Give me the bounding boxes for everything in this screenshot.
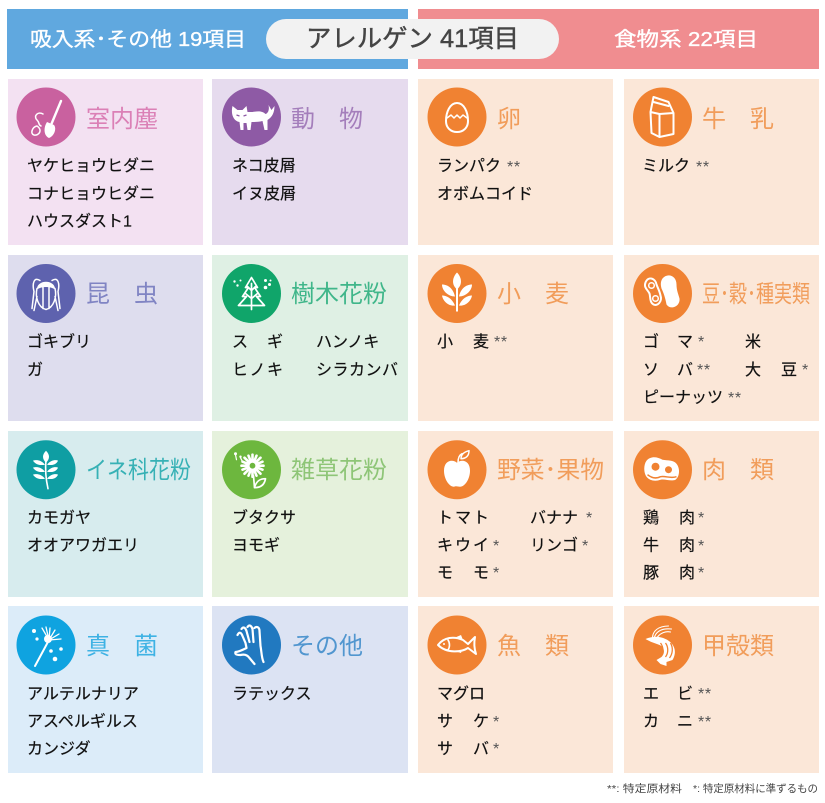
panel: 樹木花粉: シラカンバ: [316, 362, 398, 379]
panel: 真菌: アスペルギルス: [27, 712, 138, 730]
icon: apple: [428, 440, 486, 499]
panel: 豆・穀・種実類: [624, 255, 819, 421]
icon: cockroach: [16, 264, 76, 323]
panel: 豆・穀・種実類: 豆: [781, 362, 797, 379]
panel: 卵: 卵: [497, 106, 521, 133]
panel: 甲殻類: ニ: [677, 714, 693, 730]
panel: 魚類: サ: [437, 714, 453, 730]
panel: 野菜・果物: 野菜･果物: [497, 457, 604, 484]
icon: hand: [222, 616, 281, 674]
panel: 肉類: *: [698, 510, 705, 527]
panel: 卵: **: [507, 159, 521, 176]
panel: 室内塵: ハウスダスト1: [27, 212, 132, 230]
panel: 豆・穀・種実類: ピーナッツ: [643, 390, 723, 406]
panel: 真菌: [8, 606, 203, 773]
panel: 野菜・果物: モ: [437, 565, 453, 582]
panel: 牛乳: [624, 79, 819, 245]
panel: 豆・穀・種実類: *: [802, 362, 809, 379]
panel: 牛乳: ミルク: [642, 157, 690, 175]
panel: イネ科花粉: オオアワガエリ: [27, 536, 139, 554]
panel: 魚類: [418, 606, 613, 773]
panel: 小麦: [418, 255, 613, 421]
icon: wheat: [428, 264, 486, 323]
panel: 肉類: [624, 431, 819, 597]
title pill: [266, 19, 559, 59]
panel: 豆・穀・種実類: マ: [677, 334, 693, 351]
panel: 小麦: **: [494, 334, 508, 351]
panel: 肉類: *: [698, 565, 705, 582]
panel: 野菜・果物: トマト: [437, 510, 489, 527]
panel: 昆虫: ガ: [27, 361, 43, 379]
panel: 魚類: *: [493, 741, 500, 758]
header band: inhalant: [7, 9, 408, 69]
panel: 甲殻類: ビ: [677, 685, 693, 703]
header band: food: 食物系 22項目: [614, 28, 758, 51]
panel: 野菜・果物: リンゴ: [530, 536, 578, 554]
panel: 動物: 動: [291, 106, 315, 133]
panel: 野菜・果物: キウイ: [437, 536, 489, 554]
panel: 野菜・果物: *: [493, 538, 500, 555]
panel: 魚類: ケ: [473, 712, 489, 730]
panel: 樹木花粉: ヒノキ: [232, 362, 283, 379]
title pill: アレルゲン 41項目: [306, 25, 519, 53]
panel: 肉類: 肉: [679, 536, 695, 554]
panel: 肉類: 鶏: [643, 509, 659, 527]
panel: 豆・穀・種実類: **: [728, 390, 742, 407]
panel: 小麦: 麦: [545, 281, 569, 308]
panel: 魚類: マグロ: [437, 685, 485, 703]
panel: 肉類: 牛: [643, 536, 659, 554]
panel: 真菌: 菌: [134, 633, 158, 660]
panel: 甲殻類: エ: [643, 686, 659, 703]
icon: broom and dust: [16, 88, 76, 146]
icon: weed flower: [222, 440, 281, 499]
panel: イネ科花粉: イネ科花粉: [86, 457, 191, 484]
panel: 卵: [418, 79, 613, 245]
panel: 野菜・果物: *: [586, 510, 593, 527]
icon: egg: [428, 88, 486, 146]
header band: inhalant: 吸入系･その他 19項目: [30, 28, 246, 51]
panel: イネ科花粉: [8, 431, 203, 597]
icon: grass leaf: [16, 440, 76, 499]
panel: 卵: ランパク: [437, 157, 501, 175]
icon: tree with pollen: [222, 264, 281, 323]
panel: 肉類: 豚: [643, 564, 659, 582]
panel: 昆虫: 昆: [86, 281, 110, 308]
panel: 豆・穀・種実類: ソ: [643, 362, 659, 379]
panel: 肉類: 肉: [702, 457, 726, 484]
icon: cat: [222, 88, 281, 146]
panel: 肉類: 肉: [679, 509, 695, 527]
footnote legend: **: 特定原材料: [607, 782, 683, 795]
panel: 真菌: 真: [86, 633, 110, 660]
panel: 室内塵: コナヒョウヒダニ: [27, 185, 155, 203]
panel: 豆・穀・種実類: **: [697, 362, 711, 379]
footnote legend: *: 特定原材料に準ずるもの: [693, 782, 818, 795]
panel: 豆・穀・種実類: 米: [745, 333, 761, 351]
panel: 肉類: 類: [750, 457, 774, 484]
icon: spores: [16, 616, 76, 674]
panel: 室内塵: [8, 79, 203, 245]
header band: food: [418, 9, 819, 69]
icon: meat: [633, 440, 692, 499]
panel: 豆・穀・種実類: 大: [745, 361, 761, 379]
panel: 真菌: カンジダ: [27, 740, 91, 758]
panel: 樹木花粉: [212, 255, 408, 421]
panel: 小麦: 小: [497, 281, 521, 308]
panel: 牛乳: 乳: [750, 106, 774, 133]
panel: 甲殻類: **: [698, 686, 712, 703]
icon: shrimp: [633, 616, 692, 674]
icon: fish: [428, 616, 486, 674]
panel: 樹木花粉: ハンノキ: [316, 334, 379, 351]
panel: 甲殻類: カ: [643, 714, 659, 730]
panel: 魚類: *: [493, 714, 500, 731]
panel: 豆・穀・種実類: *: [698, 334, 705, 351]
panel: 野菜・果物: [418, 431, 613, 597]
panel: 小麦: 小: [437, 333, 453, 351]
panel: イネ科花粉: カモガヤ: [27, 509, 91, 527]
panel: 動物: [212, 79, 408, 245]
panel: 甲殻類: **: [698, 714, 712, 731]
panel: 室内塵: 室内塵: [86, 106, 158, 133]
panel: 甲殻類: 甲殻類: [702, 633, 774, 660]
panel: 魚類: バ: [473, 741, 489, 758]
footnote legend: [607, 782, 818, 795]
panel: その他: ラテックス: [232, 685, 312, 703]
panel: 魚類: 類: [545, 633, 569, 660]
panel: 肉類: *: [698, 538, 705, 555]
panel: 動物: ネコ皮屑: [232, 157, 296, 175]
panel: 動物: イヌ皮屑: [232, 185, 296, 203]
panel: 真菌: アルテルナリア: [27, 686, 139, 703]
panel: その他: その他: [291, 633, 363, 660]
panel: 野菜・果物: *: [582, 538, 589, 555]
panel: 雑草花粉: [212, 431, 408, 597]
panel: 肉類: 肉: [679, 564, 695, 582]
panel: 豆・穀・種実類: ゴ: [643, 332, 659, 351]
panel: 昆虫: 虫: [134, 281, 158, 308]
panel: 牛乳: 牛: [702, 106, 726, 133]
panel: 動物: 物: [339, 106, 363, 133]
panel: 昆虫: [8, 255, 203, 421]
panel: 樹木花粉: 樹木花粉: [291, 281, 387, 308]
panel: 樹木花粉: ス: [232, 334, 248, 351]
panel: 豆・穀・種実類: バ: [677, 362, 693, 379]
panel: 雑草花粉: ヨモギ: [232, 536, 280, 554]
panel: 魚類: サ: [437, 741, 453, 758]
panel: 野菜・果物: *: [493, 565, 500, 582]
panel: 野菜・果物: モ: [473, 565, 489, 582]
panel: 卵: オボムコイド: [437, 185, 533, 203]
panel: 樹木花粉: ギ: [267, 333, 283, 351]
icon: peanuts: [633, 264, 692, 323]
panel: 雑草花粉: 雑草花粉: [291, 457, 387, 484]
panel: 雑草花粉: ブタクサ: [232, 508, 296, 527]
icon: milk carton: [633, 88, 692, 146]
panel: 甲殻類: [624, 606, 819, 773]
panel: 野菜・果物: バナナ: [530, 510, 578, 527]
panel: 小麦: 麦: [473, 333, 489, 351]
panel: 牛乳: **: [696, 159, 710, 176]
panel: 室内塵: ヤケヒョウヒダニ: [27, 157, 155, 175]
panel: 魚類: 魚: [497, 633, 521, 660]
panel: その他: [212, 606, 408, 773]
panel: 昆虫: ゴキブリ: [27, 332, 91, 351]
